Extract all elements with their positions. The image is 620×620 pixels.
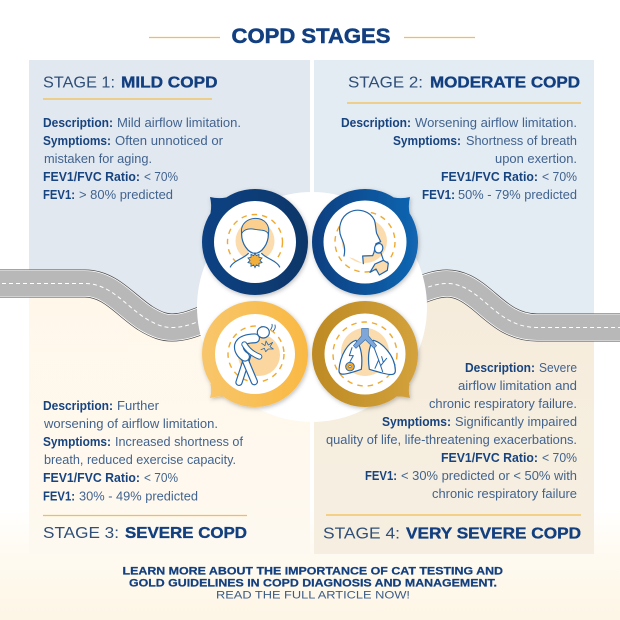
text: stage 2 details: Worsening airflow limitation.	[415, 116, 577, 130]
center white circle	[197, 192, 427, 422]
heading: stage 1	[43, 74, 218, 99]
text: stage 4 details	[326, 361, 577, 501]
heading: stage 4	[323, 515, 581, 542]
text: stage 4 details: Significantly impaired	[455, 415, 577, 429]
text: stage 4 details: Description:	[465, 361, 535, 375]
text: stage 4 details: airflow limitation and	[458, 379, 577, 393]
footer call to action	[122, 566, 503, 602]
heading: stage 3: STAGE 3:	[43, 525, 119, 542]
icon: stage 4 badge, lungs	[312, 301, 418, 407]
text: stage 3 details: Further	[117, 399, 159, 413]
text: stage 3 details: < 70%	[144, 471, 178, 485]
text: stage 1 details: Often unnoticed or	[115, 134, 223, 148]
footer call to action: GOLD GUIDELINES IN COPD DIAGNOSIS AND MANAGEMENT.	[129, 578, 497, 590]
text: stage 3 details: Increased shortness of	[115, 435, 243, 449]
text: stage 3 details: FEV1/FVC Ratio:	[43, 471, 140, 485]
text: stage 4 details: < 70%	[542, 451, 577, 465]
text: stage 2 details: 50% - 79% predicted	[458, 188, 577, 202]
heading: stage 3	[43, 516, 247, 542]
text: stage 2 details: Symptioms:	[393, 134, 461, 148]
text: stage 4 details: < 30% predicted or < 50% with	[401, 469, 577, 483]
road: right	[415, 284, 620, 328]
icon: stage 2 badge, head with inhaler	[312, 189, 418, 295]
text: stage 2 details: < 70%	[542, 170, 577, 184]
panel: stage 4	[314, 284, 594, 554]
heading: stage 2: STAGE 2:	[348, 74, 423, 92]
text: stage 1 details	[43, 116, 241, 202]
text: stage 1 details: FEV1:	[43, 188, 75, 202]
title: COPD STAGES	[232, 25, 390, 48]
road: left	[0, 284, 205, 328]
heading: stage 2	[347, 74, 581, 103]
text: stage 1 details: Symptioms:	[43, 134, 111, 148]
text: stage 3 details	[43, 399, 243, 504]
text: stage 2 details	[341, 116, 577, 202]
heading: stage 1: STAGE 1:	[43, 74, 115, 92]
text: stage 1 details: mistaken for aging.	[44, 152, 152, 166]
text: stage 3 details: FEV1:	[43, 490, 75, 504]
text: stage 4 details: Severe	[539, 361, 577, 375]
text: stage 3 details: worsening of airflow limitation.	[43, 417, 218, 431]
icon: stage 1 badge, person with chest pain	[202, 189, 308, 295]
heading: stage 2: MODERATE COPD	[430, 74, 580, 92]
text: stage 3 details: Description:	[43, 399, 113, 413]
text: stage 2 details: FEV1/FVC Ratio:	[441, 170, 538, 184]
text: stage 4 details: Symptioms:	[382, 415, 451, 429]
icon: stage 3 badge, person bending over coughing	[202, 301, 308, 407]
text: stage 2 details: upon exertion.	[495, 152, 577, 166]
text: stage 4 details: FEV1/FVC Ratio:	[441, 451, 538, 465]
heading: stage 3: SEVERE COPD	[125, 525, 247, 542]
text: stage 1 details: > 80% predicted	[79, 188, 173, 202]
text: stage 2 details: Description:	[341, 116, 411, 130]
text: stage 4 details: chronic respiratory failure	[432, 487, 577, 501]
heading: stage 4: VERY SEVERE COPD	[406, 526, 581, 542]
text: stage 1 details: Description:	[43, 116, 113, 130]
text: stage 4 details: chronic respiratory failure.	[429, 397, 577, 411]
panel: stage 1	[29, 60, 310, 330]
text: stage 4 details: quality of life, life-threatening exacerbations.	[326, 433, 577, 447]
text: stage 2 details: FEV1:	[422, 188, 455, 202]
text: stage 1 details: < 70%	[144, 170, 178, 184]
heading: stage 1: MILD COPD	[121, 74, 218, 92]
heading: stage 4: STAGE 4:	[323, 526, 400, 542]
text: stage 3 details: breath, reduced exercise capacity.	[44, 453, 236, 467]
footer call to action: READ THE FULL ARTICLE NOW!	[216, 590, 410, 602]
text: stage 1 details: FEV1/FVC Ratio:	[43, 170, 140, 184]
text: stage 3 details: Symptioms:	[43, 435, 111, 449]
text: stage 2 details: Shortness of breath	[466, 134, 577, 148]
text: stage 3 details: 30% - 49% predicted	[79, 490, 198, 504]
footer call to action: LEARN MORE ABOUT THE IMPORTANCE OF CAT TESTING AND	[122, 566, 503, 578]
text: stage 1 details: Mild airflow limitation.	[117, 116, 241, 130]
panel: stage 2	[314, 60, 594, 330]
panel: stage 3	[29, 284, 310, 554]
text: stage 4 details: FEV1:	[365, 469, 397, 483]
